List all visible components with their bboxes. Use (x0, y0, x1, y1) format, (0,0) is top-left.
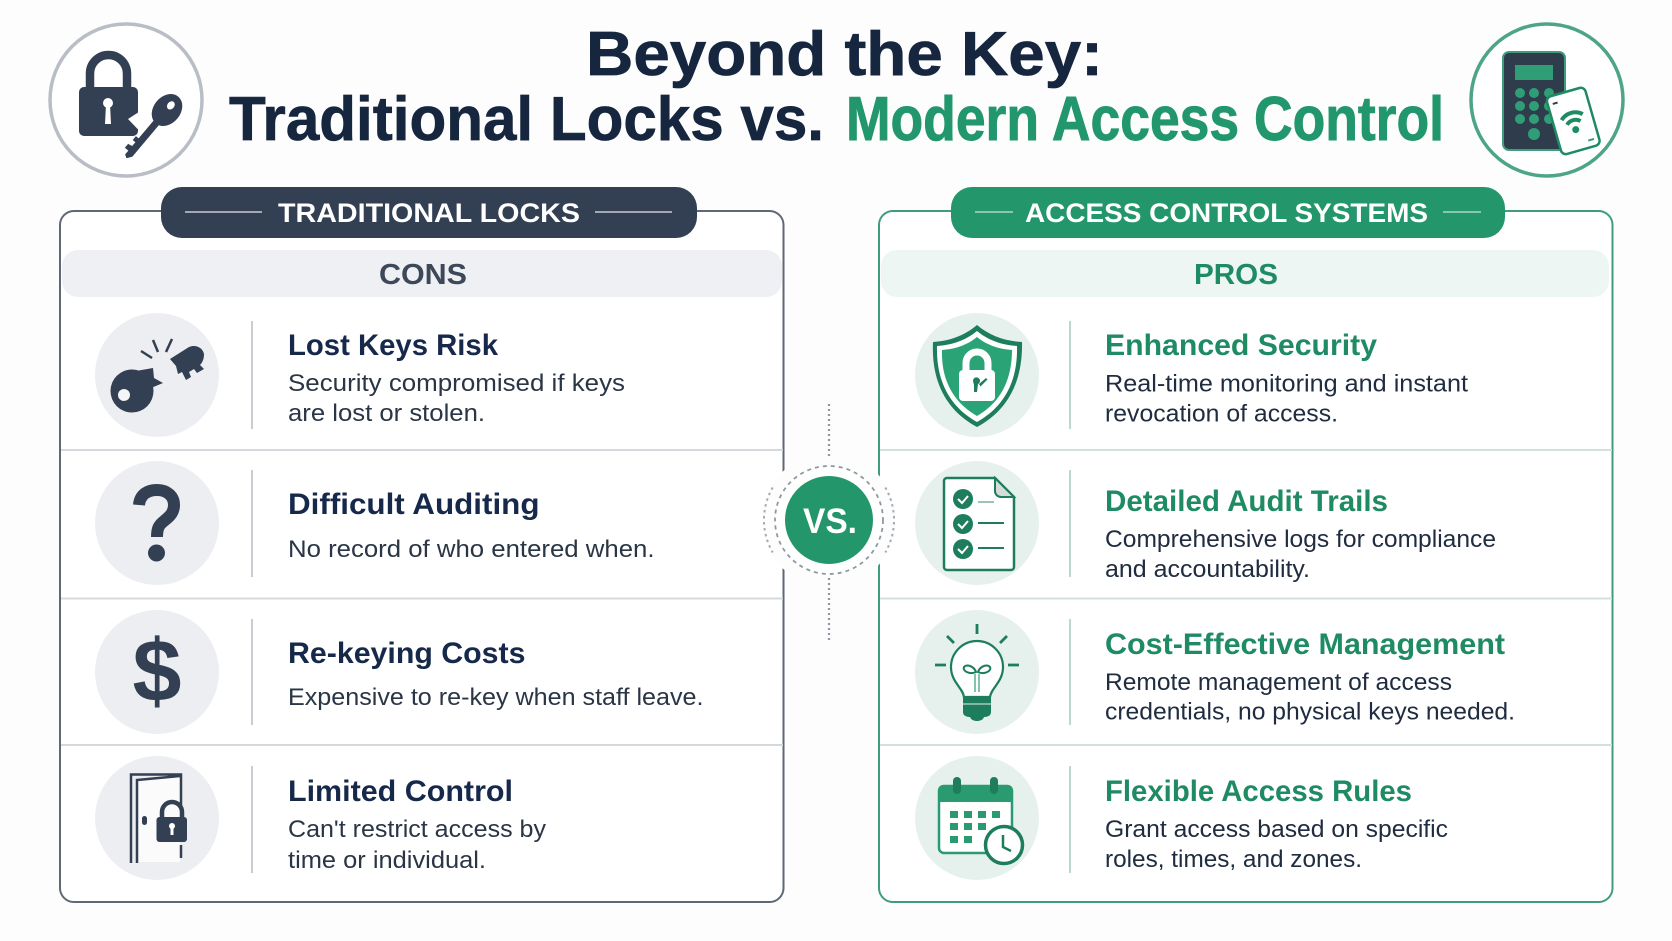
icon: shield with lock (933, 325, 1022, 427)
text (1105, 669, 1515, 726)
panel: access control systems (879, 187, 1612, 902)
row: lost keys risk (95, 313, 625, 437)
icon: broken key (110, 339, 204, 412)
heading: Lost Keys Risk (288, 329, 498, 362)
header pill: access control systems (951, 187, 1505, 238)
text (288, 816, 546, 874)
text (1105, 526, 1496, 583)
band: cons: CONS (379, 259, 467, 291)
heading: Cost-Effective Management (1105, 628, 1505, 661)
panel: traditional locks (60, 187, 784, 902)
heading: Detailed Audit Trails (1105, 485, 1388, 518)
text: Real-time monitoring and instant (1105, 370, 1468, 398)
heading: Flexible Access Rules (1105, 775, 1412, 808)
row: difficult auditing (95, 461, 654, 585)
title (229, 20, 1444, 154)
row: flexible access rules (915, 756, 1448, 880)
text (1105, 370, 1468, 428)
text: are lost or stolen. (288, 400, 485, 427)
row: limited control (95, 756, 546, 880)
vs badge (762, 404, 896, 642)
row: cost-effective management (915, 610, 1515, 734)
text (1105, 816, 1448, 873)
row: re-keying costs (95, 610, 704, 734)
text (288, 370, 625, 427)
text: time or individual. (288, 847, 486, 874)
heading: Enhanced Security (1105, 329, 1377, 362)
header pill: traditional locks (161, 187, 697, 238)
icon: dollar sign: $ (133, 621, 181, 720)
icon: question mark (139, 490, 174, 562)
title: Traditional Locks vs. (229, 85, 824, 154)
text: roles, times, and zones. (1105, 846, 1362, 873)
text: Grant access based on specific (1105, 816, 1448, 843)
band: cons (62, 250, 782, 297)
heading: Difficult Auditing (288, 488, 540, 521)
title: Modern Access Control (846, 85, 1444, 154)
icon: calendar with clock (938, 777, 1022, 864)
text: and accountability. (1105, 556, 1310, 583)
text: Security compromised if keys (288, 370, 625, 397)
text: Comprehensive logs for compliance (1105, 526, 1496, 553)
icon: light bulb (935, 624, 1019, 721)
title: Beyond the Key: (586, 20, 1103, 89)
header pill: traditional locks: TRADITIONAL LOCKS (278, 198, 580, 228)
text: credentials, no physical keys needed. (1105, 698, 1515, 726)
heading: Limited Control (288, 775, 513, 808)
text: revocation of access. (1105, 400, 1338, 428)
icon: keypad and phone (1471, 24, 1623, 176)
band: pros (881, 250, 1609, 297)
text: Remote management of access (1105, 669, 1452, 696)
text: No record of who entered when. (288, 536, 654, 563)
text: Expensive to re-key when staff leave. (288, 684, 704, 711)
row: enhanced security (915, 313, 1468, 437)
row: detailed audit trails (915, 461, 1496, 585)
vs badge: VS. (803, 502, 857, 541)
heading: Re-keying Costs (288, 637, 526, 670)
band: pros: PROS (1194, 259, 1278, 291)
icon: padlock and key (50, 24, 202, 176)
text: Can't restrict access by (288, 816, 546, 843)
header pill: access control systems: ACCESS CONTROL SYSTEMS (1025, 198, 1428, 228)
icon: checklist document (944, 478, 1014, 570)
icon: locked door (131, 774, 187, 863)
